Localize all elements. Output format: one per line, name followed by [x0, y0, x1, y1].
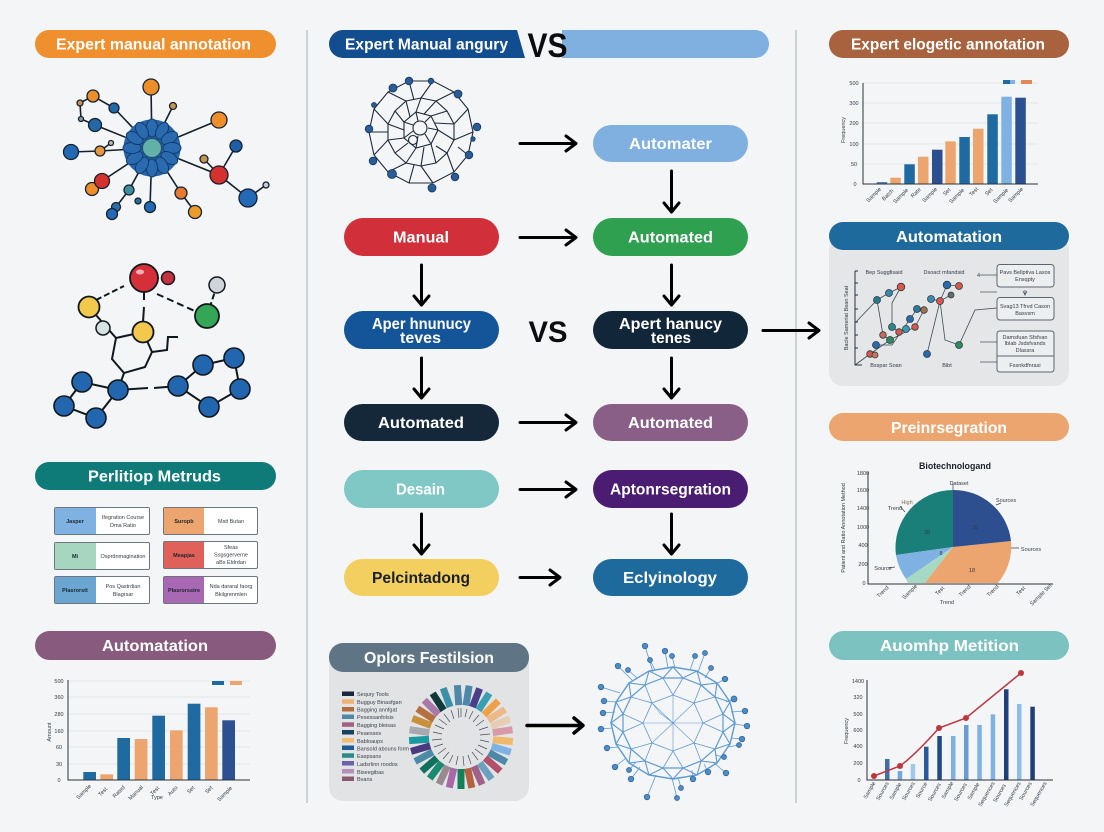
card: orange: [164, 508, 258, 534]
callout boxes: Basvsm: [1015, 311, 1035, 317]
combo chart: bars and red line: Sources: [992, 783, 1008, 804]
bar chart: right top: 50: [851, 162, 857, 168]
heading: perlitiop metruds: [35, 462, 276, 490]
legend: category swatches: Peaesses: [357, 731, 381, 737]
card: violet: Nda dararal faorg: [210, 584, 252, 590]
heading: preinrsegration: Preinrsegration: [891, 420, 1007, 437]
bar chart: left: Set: [204, 785, 215, 795]
arrow: to automation panel: [763, 323, 819, 338]
bar chart: right top: 200: [849, 121, 859, 127]
pill: automated dark: [344, 404, 499, 441]
card: red: Meapjas: [173, 553, 195, 559]
combo chart: bars and red line: Sources: [875, 781, 891, 802]
card: orange: Suropb: [174, 519, 194, 525]
pie chart: biotechnologand: 1400: [857, 506, 869, 512]
card: blue: Ifegration Course: [102, 515, 144, 521]
pill: manual: Manual: [393, 230, 449, 246]
heading: automatation left: [35, 631, 276, 660]
pie chart: biotechnologand: 0: [862, 581, 866, 587]
card: red: Ssgsgerverne: [214, 552, 248, 558]
pill: desain: [344, 470, 499, 508]
pie chart: biotechnologand: Sources: [1021, 547, 1041, 553]
callout boxes: Pavs Bellptiva Lasos: [1000, 270, 1051, 276]
combo chart: bars and red line: Sources: [901, 781, 917, 802]
heading: centre comparison banner: VS: [528, 27, 568, 65]
callout boxes: Dlassra: [1016, 348, 1035, 354]
bar chart: left: 500: [54, 679, 64, 685]
pie chart: biotechnologand: 200: [858, 562, 868, 568]
pill: eclyinology: [593, 559, 748, 596]
icon: polyhedral mesh sphere: [365, 77, 481, 192]
bar chart: left: Auto: [167, 785, 179, 797]
arrow: desain to aptonrsegration: [520, 482, 576, 497]
pill: apert hanucy tenes: tenes: [651, 330, 691, 347]
pill: aper hnunucy teves: Aper hnunucy: [372, 316, 471, 333]
panel: oplors festilsion: [329, 643, 529, 801]
bar chart: right top: Frequency: [841, 117, 847, 143]
arrow: manual down: [414, 265, 429, 305]
pill: eclyinology: Eclyinology: [623, 570, 717, 587]
pie chart: biotechnologand: 1600: [857, 488, 869, 494]
pill: pelcintadong: [344, 559, 499, 596]
chart: scatter line: Bacle Sameriat Bean Seat: [844, 285, 850, 350]
callout boxes: Damsfuan Sfsfvan: [1003, 335, 1047, 341]
bar chart: left: 0: [57, 778, 61, 784]
card: red: Sfeas: [224, 545, 238, 551]
card: mint: Osprdnmagination: [101, 554, 145, 560]
combo chart: bars and red line: Sequences: [978, 781, 997, 808]
combo chart: bars and red line: Sample: [967, 782, 981, 801]
pie chart: biotechnologand: 8: [939, 551, 943, 557]
pill: desain: Desain: [396, 482, 445, 498]
panel: method cards: [54, 508, 258, 604]
arrow: manual to automated: [520, 230, 576, 245]
card: violet: [164, 576, 258, 604]
pie chart: biotechnologand: 400: [858, 543, 868, 549]
card: blue: Jasper: [66, 519, 85, 525]
heading: automatation left: Automatation: [102, 638, 208, 655]
combo chart: bars and red line: 600: [853, 728, 863, 734]
pill: aper hnunucy teves: teves: [400, 330, 441, 347]
bar chart: left: 280: [54, 712, 64, 718]
combo chart: bars and red line: 400: [853, 744, 863, 750]
arrow: automated row: [520, 415, 576, 430]
pill: pelcintadong: Pelcintadong: [372, 570, 470, 587]
chart: scatter line: Bep Suggfisaid: [866, 270, 902, 276]
arrow: automated green down: [664, 265, 679, 305]
legend: category swatches: Sequry Tools: [357, 692, 389, 698]
icon: star molecular network: [64, 79, 269, 220]
pie chart: biotechnologand: Patient and Ratio Annotation Method: [841, 483, 847, 573]
legend: category swatches: Bansold abouns form: [357, 746, 409, 752]
bar chart: left: Manual: [128, 785, 145, 802]
card: blue: Dma Ratio: [110, 523, 136, 529]
combo chart: bars and red line: 500: [853, 712, 863, 718]
heading: oplors festilsion: Oplors Festilsion: [364, 650, 494, 667]
chart: scatter line: Bibt: [942, 363, 952, 369]
bar chart: left: Rated: [112, 785, 127, 800]
card: mint: [54, 542, 150, 570]
pie chart: biotechnologand: Trend: [876, 585, 890, 599]
combo chart: bars and red line: 1400: [852, 679, 864, 685]
legend: category swatches: Bugguy Binasfgan: [357, 700, 402, 706]
pie chart: biotechnologand: 1800: [857, 471, 869, 477]
pie chart: biotechnologand: 1000: [857, 525, 869, 531]
card: orange: Msit Butan: [218, 519, 244, 525]
bar chart: left: 160: [54, 729, 64, 735]
trend line: [871, 670, 1024, 779]
pill: automater: Automater: [629, 136, 712, 153]
heading: expert elogetic annotation: Expert elogetic annotation: [851, 36, 1045, 54]
label: vs: VS: [528, 316, 568, 349]
pill: automated green: Automated: [628, 230, 713, 246]
heading: expert manual annotation: [35, 30, 276, 58]
heading: auomhp metition: Auomhp Metition: [880, 638, 1019, 655]
combo chart: bars and red line: Sequences: [1004, 781, 1023, 808]
pie chart: biotechnologand: Trend: [940, 600, 954, 606]
callout boxes: Fssnkdfnrasi: [1009, 363, 1041, 369]
pill: manual: [344, 218, 499, 256]
heading: expert elogetic annotation: [829, 30, 1069, 58]
callout boxes: 4: [977, 273, 980, 279]
combo chart: bars and red line: 320: [853, 695, 863, 701]
bar chart: left: [47, 679, 250, 803]
bar chart: right top: Test: [969, 186, 980, 198]
combo chart: bars and red line: Sources: [1018, 781, 1034, 802]
chart: scatter line: [844, 270, 997, 369]
arrow: pelcintadong to eclyinology: [520, 570, 560, 585]
heading: auomhp metition: [829, 631, 1069, 660]
pie chart: biotechnologand: 38: [924, 530, 930, 536]
legend: category swatches: Bagging bleisas: [357, 723, 396, 729]
bar chart: right top: Sample: [1008, 187, 1025, 204]
bar chart: right top: Sample: [993, 188, 1010, 205]
bar chart: left: 60: [56, 745, 62, 751]
heading: expert manual annotation: Expert manual annotation: [56, 36, 251, 54]
combo chart: bars and red line: Sources: [953, 782, 969, 803]
heading: centre comparison banner: Expert Manual angury: [345, 36, 508, 54]
arrow: apert down: [664, 358, 679, 398]
pill: apert hanucy tenes: Apert hanucy: [619, 316, 722, 333]
pill: automated purple: [593, 404, 748, 441]
legend: category swatches: [342, 692, 409, 783]
pie chart: biotechnologand: 26: [972, 525, 978, 531]
bar chart: right top: 100: [849, 142, 859, 148]
card: mint: Mi: [72, 554, 79, 560]
legend: category swatches: Pesessanfolsis: [357, 715, 394, 721]
card: steel blue: Pos Qastrdian: [106, 584, 140, 590]
legend: category swatches: Babloaups: [357, 739, 383, 745]
pill: automated purple: Automated: [628, 415, 713, 432]
card: steel blue: Blagrsar: [113, 592, 133, 598]
callout boxes: Ensqpty: [1015, 277, 1035, 283]
pie chart: biotechnologand: High: [901, 500, 913, 506]
bar chart: left: Amount: [47, 722, 53, 741]
card: blue: [54, 508, 150, 534]
combo chart: bars and red line: 0: [857, 778, 861, 784]
pill: aptonrsegration: [593, 470, 748, 508]
callout boxes: Svag13 Tfrvd Cason: [1000, 304, 1050, 310]
pill: aper hnunucy teves: [344, 311, 499, 349]
pie chart: biotechnologand: Sample Set: [1029, 583, 1054, 607]
card: red: [164, 542, 258, 568]
legend: category swatches: Bvans: [357, 777, 373, 783]
arrow: automater down: [664, 171, 679, 212]
bar chart: left: 30: [56, 762, 62, 768]
legend: category swatches: Biseegibas: [357, 770, 384, 776]
card: steel blue: [54, 576, 150, 604]
callout boxes: [977, 264, 1054, 372]
combo chart: bars and red line: Sample: [941, 781, 955, 800]
combo chart: bars and red line: Sample: [889, 782, 903, 801]
bar chart: left: Set: [186, 785, 197, 795]
legend: category swatches: Ladsrlinn roodos: [357, 762, 398, 768]
pie chart: biotechnologand: Trend: [986, 584, 1000, 598]
bar chart: left: Sample: [76, 784, 93, 801]
heading: automatation right: Automatation: [896, 229, 1002, 246]
chart: scatter line: Bsspar Soan: [870, 363, 902, 369]
arrow: mesh to automater: [520, 136, 576, 151]
bar chart: left: Test: [150, 785, 161, 797]
pie chart: biotechnologand: Sources: [996, 498, 1016, 504]
pie chart: biotechnologand: Test: [935, 585, 946, 597]
icon: network hub flower: [123, 119, 181, 177]
pie chart: biotechnologand: Dataset: [950, 481, 969, 487]
chart: scatter line: Dsoact mfandsid: [924, 270, 964, 276]
bar chart: left: Type: [151, 795, 163, 801]
bar chart: left: Sample: [217, 786, 234, 803]
pie chart: biotechnologand: Source: [874, 566, 892, 572]
card: red: aBs Eldrdan: [216, 560, 246, 566]
arrow: aptonrsegration down: [664, 514, 679, 554]
heading: preinrsegration: [829, 413, 1069, 441]
combo chart: bars and red line: Sources: [927, 782, 943, 803]
combo chart: bars and red line: [844, 670, 1053, 808]
bar chart: left: Test: [98, 786, 109, 798]
combo chart: bars and red line: Frequency: [844, 718, 850, 744]
pie chart: biotechnologand: Trend: [888, 506, 902, 512]
pie chart: biotechnologand: Sample: [902, 584, 919, 601]
arrow: aper down: [414, 358, 429, 398]
pie chart: biotechnologand: [841, 461, 1054, 607]
arrow: festilsion to network: [527, 718, 583, 733]
bar chart: right top: Sample: [949, 188, 966, 205]
pill: apert hanucy tenes: [593, 311, 748, 349]
heading: perlitiop metruds: Perlitiop Metruds: [88, 468, 221, 486]
pie chart: biotechnologand: 18: [969, 568, 975, 574]
card: violet: Plasrorsstre: [168, 588, 200, 594]
combo chart: bars and red line: Sample: [863, 781, 877, 800]
pill: automated dark: Automated: [378, 415, 464, 432]
bar chart: right top: 0: [853, 182, 857, 188]
pill: automated green: [593, 218, 748, 256]
pie chart: biotechnologand: Test: [1016, 585, 1027, 597]
bar chart: right top: Sample: [866, 187, 883, 204]
combo chart: bars and red line: 200: [853, 761, 863, 767]
bar chart: right top: Sample: [893, 188, 910, 205]
icon: blue mesh network: [598, 643, 750, 800]
card: steel blue: Plasrorstt: [62, 588, 88, 594]
panel: automatation: [829, 222, 1069, 386]
callout boxes: Iblab Jsdsfvands: [1005, 341, 1046, 347]
heading: centre comparison banner: [329, 27, 769, 65]
bar chart: right top: 300: [849, 101, 859, 107]
legend: category swatches: Easpsans: [357, 754, 381, 760]
bar chart: right top: Batch: [881, 188, 895, 202]
combo chart: bars and red line: Source: [915, 781, 929, 800]
bar chart: left: 360: [54, 695, 64, 701]
legend: category swatches: Bagging annfgat: [357, 708, 398, 714]
icon: ball and stick molecule: [54, 264, 250, 428]
bar chart: right top: Sample: [922, 187, 939, 204]
bar chart: right top: Rate: [910, 187, 923, 200]
bar chart: right top: Set: [942, 187, 953, 197]
bar chart: right top: Set: [984, 187, 995, 197]
bar chart: right top: 500: [849, 81, 859, 87]
pie chart: biotechnologand: Biotechnologand: [919, 461, 991, 472]
heading: oplors festilsion: [329, 643, 529, 672]
card: violet: Bkilgrenmlen: [215, 592, 247, 598]
combo chart: bars and red line: Sequences: [1030, 781, 1049, 808]
chart: radial wedges: [409, 685, 513, 789]
arrow: desain down: [414, 514, 429, 554]
pie chart: biotechnologand: Trend: [958, 584, 972, 598]
bar chart: right top: [841, 80, 1038, 205]
pill: aptonrsegration: Aptonrsegration: [610, 482, 731, 498]
heading: automatation right: [829, 222, 1069, 250]
pill: automater: [593, 125, 748, 162]
